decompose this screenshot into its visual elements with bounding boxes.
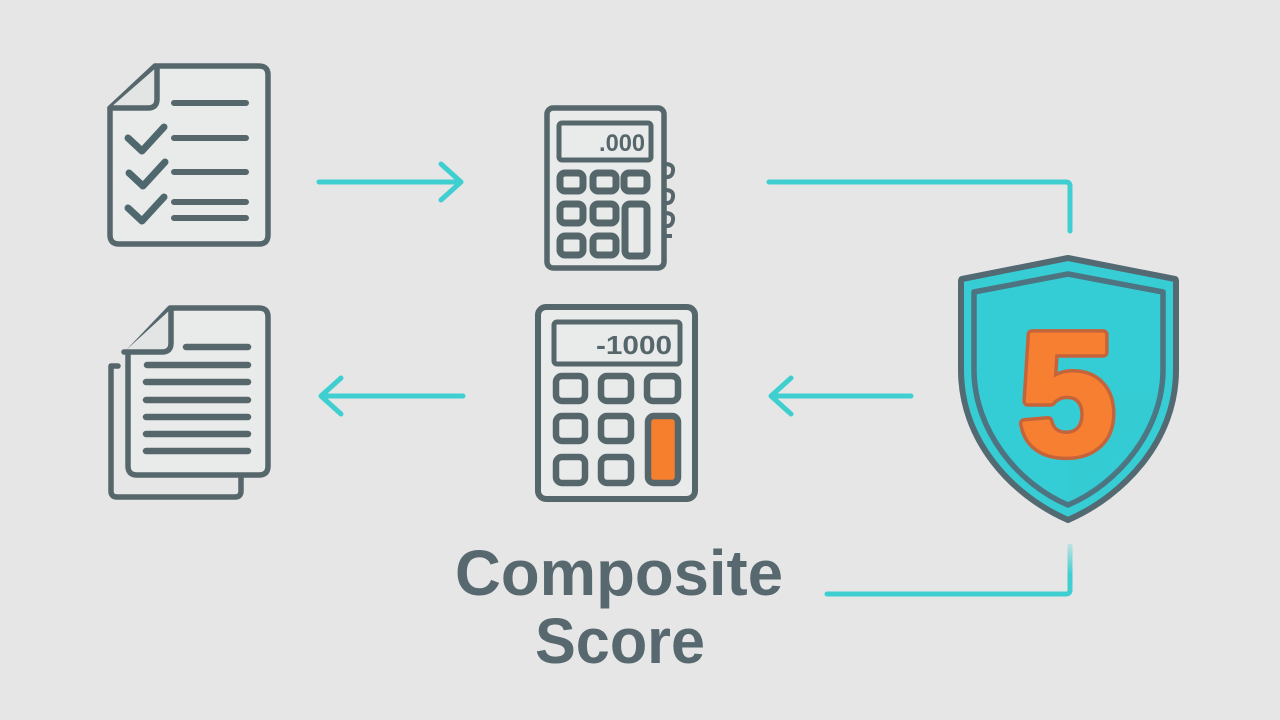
arrow: shield to large calculator bbox=[771, 378, 911, 414]
icon: checklist document bbox=[110, 66, 268, 244]
number 5: 5 bbox=[1019, 298, 1115, 490]
title: composite score: Composite bbox=[455, 537, 783, 609]
icon: large calculator with orange key bbox=[538, 307, 695, 499]
icon: stacked documents bbox=[111, 308, 268, 497]
large calculator display digits: -1000 bbox=[596, 330, 672, 360]
number 5 inner fill: 5 bbox=[1019, 298, 1115, 490]
icon: calculator with side spiral bbox=[547, 108, 673, 268]
orange key bbox=[648, 416, 678, 483]
connector: calculator to shield bbox=[769, 182, 1070, 231]
icon: shield with number 5 bbox=[961, 258, 1176, 520]
arrow: large calculator to stacked documents bbox=[321, 378, 463, 414]
title second line: Score bbox=[535, 605, 705, 677]
arrow: checklist to calculator bbox=[319, 164, 461, 200]
connector: shield to composite score bbox=[827, 546, 1070, 594]
calculator display digits: .000 bbox=[599, 130, 645, 157]
